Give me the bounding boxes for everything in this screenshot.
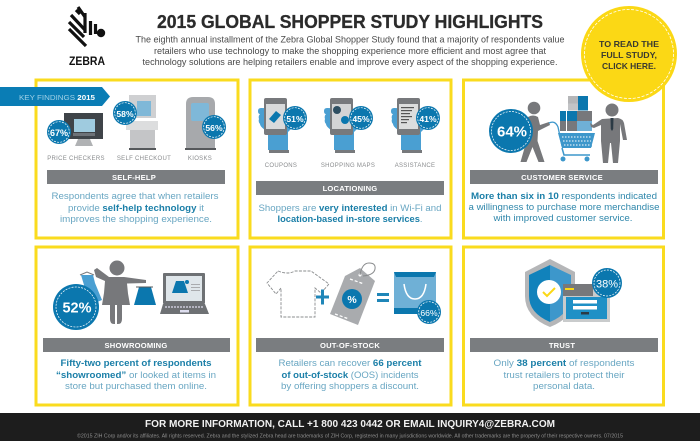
badge: 38% [592, 268, 622, 298]
badge: 52%: 52% [62, 300, 92, 316]
heading bar: showrooming [43, 338, 230, 352]
icon: coupons phone [258, 98, 307, 153]
heading bar: customer service: CUSTOMER SERVICE [521, 173, 603, 182]
panel: locationing [250, 80, 451, 238]
title: 2015 GLOBAL SHOPPER STUDY HIGHLIGHTS [157, 12, 543, 32]
text: out-of-stock: by offering shoppers a discount. [281, 381, 419, 392]
icon: self checkout [113, 95, 158, 150]
text: trust: Only 38 percent of respondents [494, 358, 635, 369]
panel: trust [464, 247, 664, 405]
callout: read the full study: FULL STUDY, [601, 51, 657, 60]
intro text: retailers who use technology to make the shopping experience more efficient and most agree that [154, 46, 546, 56]
icon: woman with dresses [78, 260, 156, 324]
panel: showrooming [36, 247, 238, 405]
icon: login window [563, 284, 610, 322]
label: coupons: COUPONS [265, 163, 297, 169]
logo wordmark: ZEBRA [69, 56, 105, 68]
icon: price checker [47, 113, 103, 146]
banner: key findings: KEY FINDINGS 2015 [19, 93, 96, 102]
text: trust: trust retailers to protect their [504, 370, 625, 381]
text: self-help: improves the shopping experience. [60, 214, 212, 225]
text: showrooming [56, 358, 216, 392]
label: assistance: ASSISTANCE [395, 163, 435, 169]
heading bar: trust [470, 338, 658, 352]
text: self-help: Respondents agree that when retailers [52, 191, 219, 202]
footer: legal line: ©2015 ZIH Corp and/or its affiliates. All rights reserved. Zebra and the stylized Zebra head are trademarks of ZIH Corp, registered in many jurisdictions worldwide. All other trademarks are the property of their respective owners. 07/2015 [77, 432, 623, 440]
icon: t-shirt outline [267, 271, 329, 317]
icon: laptop [160, 273, 209, 314]
icon: shopping maps phone: 45% [352, 114, 370, 124]
boxes [560, 96, 592, 131]
heading bar: showrooming: SHOWROOMING [105, 341, 167, 350]
intro text: The eighth annual installment of the Zebra Global Shopper Study found that a majority of respondents value [136, 34, 564, 44]
panel: self-help [36, 80, 238, 238]
heading bar: trust: TRUST [549, 341, 575, 350]
footer: contact line: FOR MORE INFORMATION, CALL +1 800 423 0442 OR EMAIL INQUIRY4@ZEBRA.COM [145, 419, 555, 430]
panel: out-of-stock [250, 247, 451, 405]
callout: read the full study: CLICK HERE. [602, 62, 656, 71]
intro text: technology solutions are helping retailers enable and improve every aspect of the shopping experience. [142, 57, 558, 67]
heading bar: self-help [47, 170, 225, 184]
icon: price tag: % [347, 294, 357, 306]
heading bar: locationing: LOCATIONING [323, 184, 377, 193]
text: self-help [52, 191, 219, 225]
heading bar: customer service [470, 170, 658, 184]
label: price checkers: PRICE CHECKERS [47, 156, 105, 162]
icon: coupons phone: 51% [286, 114, 304, 124]
label: kiosks: KIOSKS [188, 156, 212, 162]
icon: price tag [330, 263, 375, 325]
text: self-help: provide self-help technology it [68, 203, 204, 214]
text: locationing: location-based in-store services. [278, 214, 422, 225]
text: out-of-stock: Retailers can recover 66 percent [278, 358, 422, 369]
icon: customer service scene [489, 96, 627, 163]
footer [0, 413, 700, 441]
heading bar: locationing [256, 181, 444, 195]
text: customer service [468, 191, 660, 224]
intro text [136, 34, 564, 67]
text: showrooming: Fifty-two percent of respondents [60, 358, 212, 369]
callout: read the full study [581, 6, 677, 102]
heading bar: out-of-stock [256, 338, 444, 352]
icon: shopping maps phone [324, 98, 373, 153]
text: showrooming: “showroomed” or looked at items in [56, 370, 216, 381]
icon: shield [525, 259, 575, 327]
text: customer service: with improved customer service. [492, 213, 632, 224]
text: locationing: Shoppers are very interested in Wi-Fi and [258, 203, 442, 214]
icon: kiosk [185, 97, 226, 150]
text: locationing [258, 203, 442, 225]
label: shopping maps: SHOPPING MAPS [321, 163, 375, 169]
text: out-of-stock [278, 358, 422, 392]
text: customer service: a willingness to purchase more merchandise [468, 202, 660, 213]
icon: kiosk: 56% [205, 123, 223, 133]
text: customer service: More than six in 10 respondents indicated [471, 191, 657, 202]
callout: read the full study: TO READ THE [599, 40, 660, 49]
badge: 52% [53, 284, 99, 330]
icon: shopping bag [394, 272, 441, 324]
banner: key findings [0, 87, 110, 106]
badge: 64%: 64% [497, 124, 527, 140]
text: trust [494, 358, 635, 392]
icon: assistance phone: 41% [419, 114, 437, 124]
icon: assistance phone [391, 98, 440, 153]
text: showrooming: store but purchased them online. [65, 381, 207, 392]
heading bar: out-of-stock: OUT-OF-STOCK [320, 341, 380, 350]
icon: price checker: 67% [50, 128, 68, 138]
associate [590, 104, 627, 163]
icon: shopping bag: 66% [420, 308, 438, 318]
label: self checkout: SELF CHECKOUT [117, 156, 171, 162]
icon: plus [316, 290, 329, 304]
cart [558, 133, 595, 162]
badge: 38%: 38% [596, 278, 618, 290]
text: trust: personal data. [533, 381, 595, 392]
panel: customer service [464, 80, 664, 238]
logo: Zebra [69, 7, 105, 68]
shopper [520, 102, 592, 162]
icon: self checkout: 58% [116, 109, 134, 119]
icon: equals [377, 293, 389, 302]
heading bar: self-help: SELF-HELP [112, 173, 156, 182]
text: out-of-stock: of out-of-stock (OOS) incidents [282, 370, 419, 381]
